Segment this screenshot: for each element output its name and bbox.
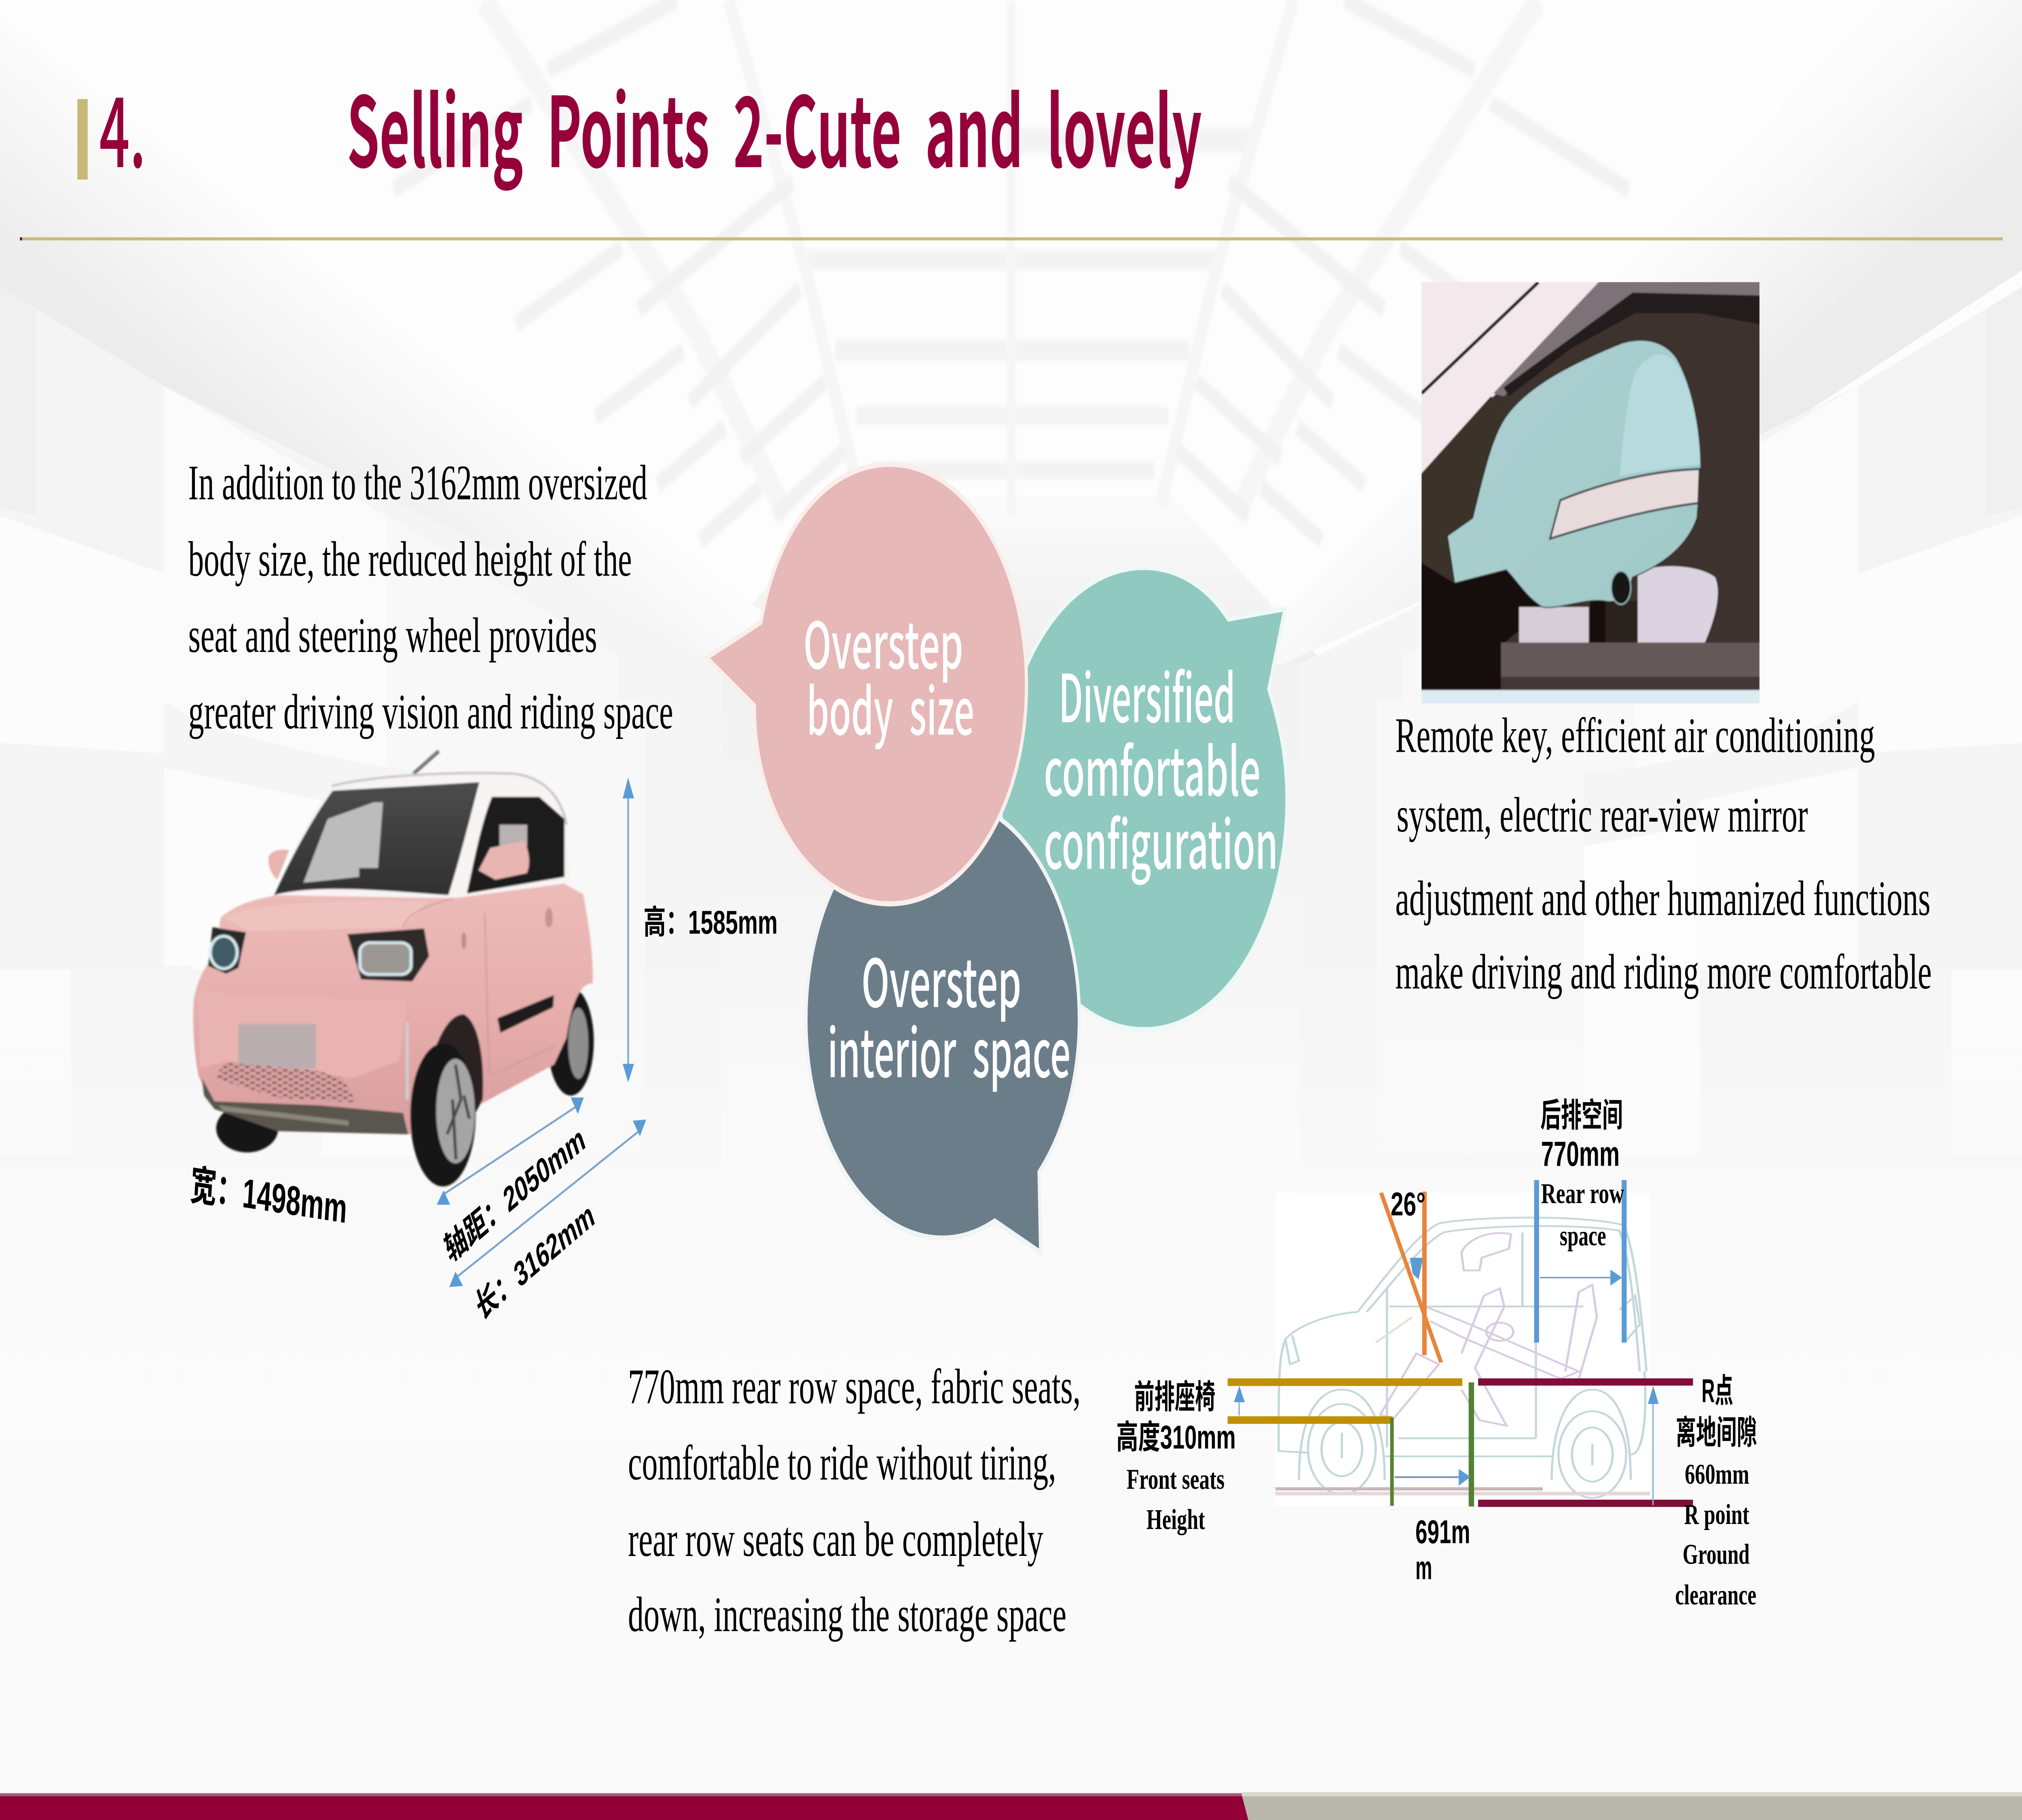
dimension arrow: wheelbase (437, 1098, 584, 1205)
label: length: 长：3162mm (472, 1196, 598, 1327)
marker: 691mm span lines (1390, 1382, 1474, 1507)
speech bubble: body size (706, 464, 1026, 904)
label: rear row space: 770mm (1541, 1135, 1620, 1174)
text block: body size: greater driving vision and riding space (188, 685, 673, 740)
label: R point ground clearance: Ground (1683, 1538, 1750, 1570)
marker: seat angle lines (1381, 1191, 1441, 1363)
text block: comfort features (1395, 709, 1932, 999)
dimension arrow: length (449, 1120, 646, 1287)
speech bubble: diversified configuration (1000, 567, 1287, 1030)
text block: comfort features: system, electric rear-view mirror (1396, 788, 1808, 843)
marker: front seat height bars (1228, 1378, 1462, 1424)
text block: body size: body size, the reduced height of the (188, 532, 632, 587)
label: front seat height: 前排座椅 (1134, 1379, 1215, 1416)
label: R point ground clearance: R点 (1702, 1373, 1733, 1409)
speech bubble: interior space: interior space (827, 1001, 1070, 1096)
speech bubble: body size: body size (807, 660, 974, 753)
car illustration: pink mini EV (193, 751, 594, 1187)
text block: rear row: down, increasing the storage space (628, 1587, 1066, 1642)
label: front seat height: 高度310mm (1116, 1419, 1236, 1456)
label: 691mm: m (1415, 1549, 1432, 1587)
label: width: 宽：1498mm (189, 1162, 348, 1232)
speech bubble: diversified configuration: comfortable (1044, 720, 1261, 815)
label: R point ground clearance (1675, 1373, 1757, 1610)
text block: body size (188, 456, 673, 740)
label: 691mm: 691m (1415, 1513, 1470, 1550)
speech bubble: diversified configuration: configuration (1044, 793, 1278, 888)
marker: rear row space lines (1534, 1180, 1626, 1343)
text block: comfort features: Remote key, efficient air conditioning (1395, 709, 1875, 763)
text block: body size: In addition to the 3162mm oversized (188, 456, 647, 510)
text block: body size: seat and steering wheel provides (188, 608, 597, 663)
marker: R point clearance bars (1478, 1378, 1693, 1507)
label: rear row space: 后排空间 (1540, 1097, 1623, 1134)
interior dimension diagram (1228, 1180, 1693, 1507)
label: front seat height: Height (1146, 1503, 1205, 1535)
text block: comfort features: adjustment and other humanized functions (1395, 872, 1931, 926)
label: R point ground clearance: R point (1684, 1498, 1749, 1530)
label: rear row space (1540, 1097, 1624, 1252)
title accent bar (77, 99, 88, 180)
text block: comfort features: make driving and riding more comfortable (1395, 945, 1932, 999)
title divider line (20, 237, 2003, 240)
label: R point ground clearance: 660mm (1685, 1458, 1749, 1490)
diagram: car side sketch (1275, 1193, 1650, 1506)
speech bubble: interior space (806, 798, 1079, 1253)
title: Selling Points 2-Cute and lovely (347, 55, 1202, 195)
label: wheelbase: 轴距：2050mm (441, 1119, 589, 1270)
label: rear row space: space (1560, 1220, 1606, 1252)
label: front seat height: Front seats (1127, 1463, 1225, 1495)
text block: rear row: 770mm rear row space, fabric seats, (628, 1359, 1081, 1414)
photo: side mirror (1416, 276, 1764, 709)
text block: rear row: rear row seats can be completely (628, 1512, 1043, 1567)
speech bubble: body size: Overstep (804, 595, 963, 687)
speech bubble: diversified configuration: Diversified (1059, 646, 1235, 742)
footer bar (0, 1792, 2022, 1820)
label: height: 高：1585mm (643, 904, 778, 941)
text block: rear row: comfortable to ride without tiring, (628, 1436, 1056, 1491)
label: R point ground clearance: 离地间隙 (1676, 1414, 1757, 1451)
speech bubble: interior space: Overstep (861, 931, 1022, 1026)
text block: rear row (628, 1359, 1081, 1642)
label: seat angle: 26° (1391, 1186, 1426, 1223)
dimension arrow: height (623, 777, 634, 1082)
label: front seat height (1116, 1379, 1236, 1535)
arrows: dimension arrows (1234, 1258, 1659, 1505)
label: rear row space: Rear row (1541, 1177, 1624, 1209)
label: 691mm (1415, 1513, 1470, 1587)
label: R point ground clearance: clearance (1675, 1579, 1756, 1610)
title number: 4. (99, 55, 146, 195)
